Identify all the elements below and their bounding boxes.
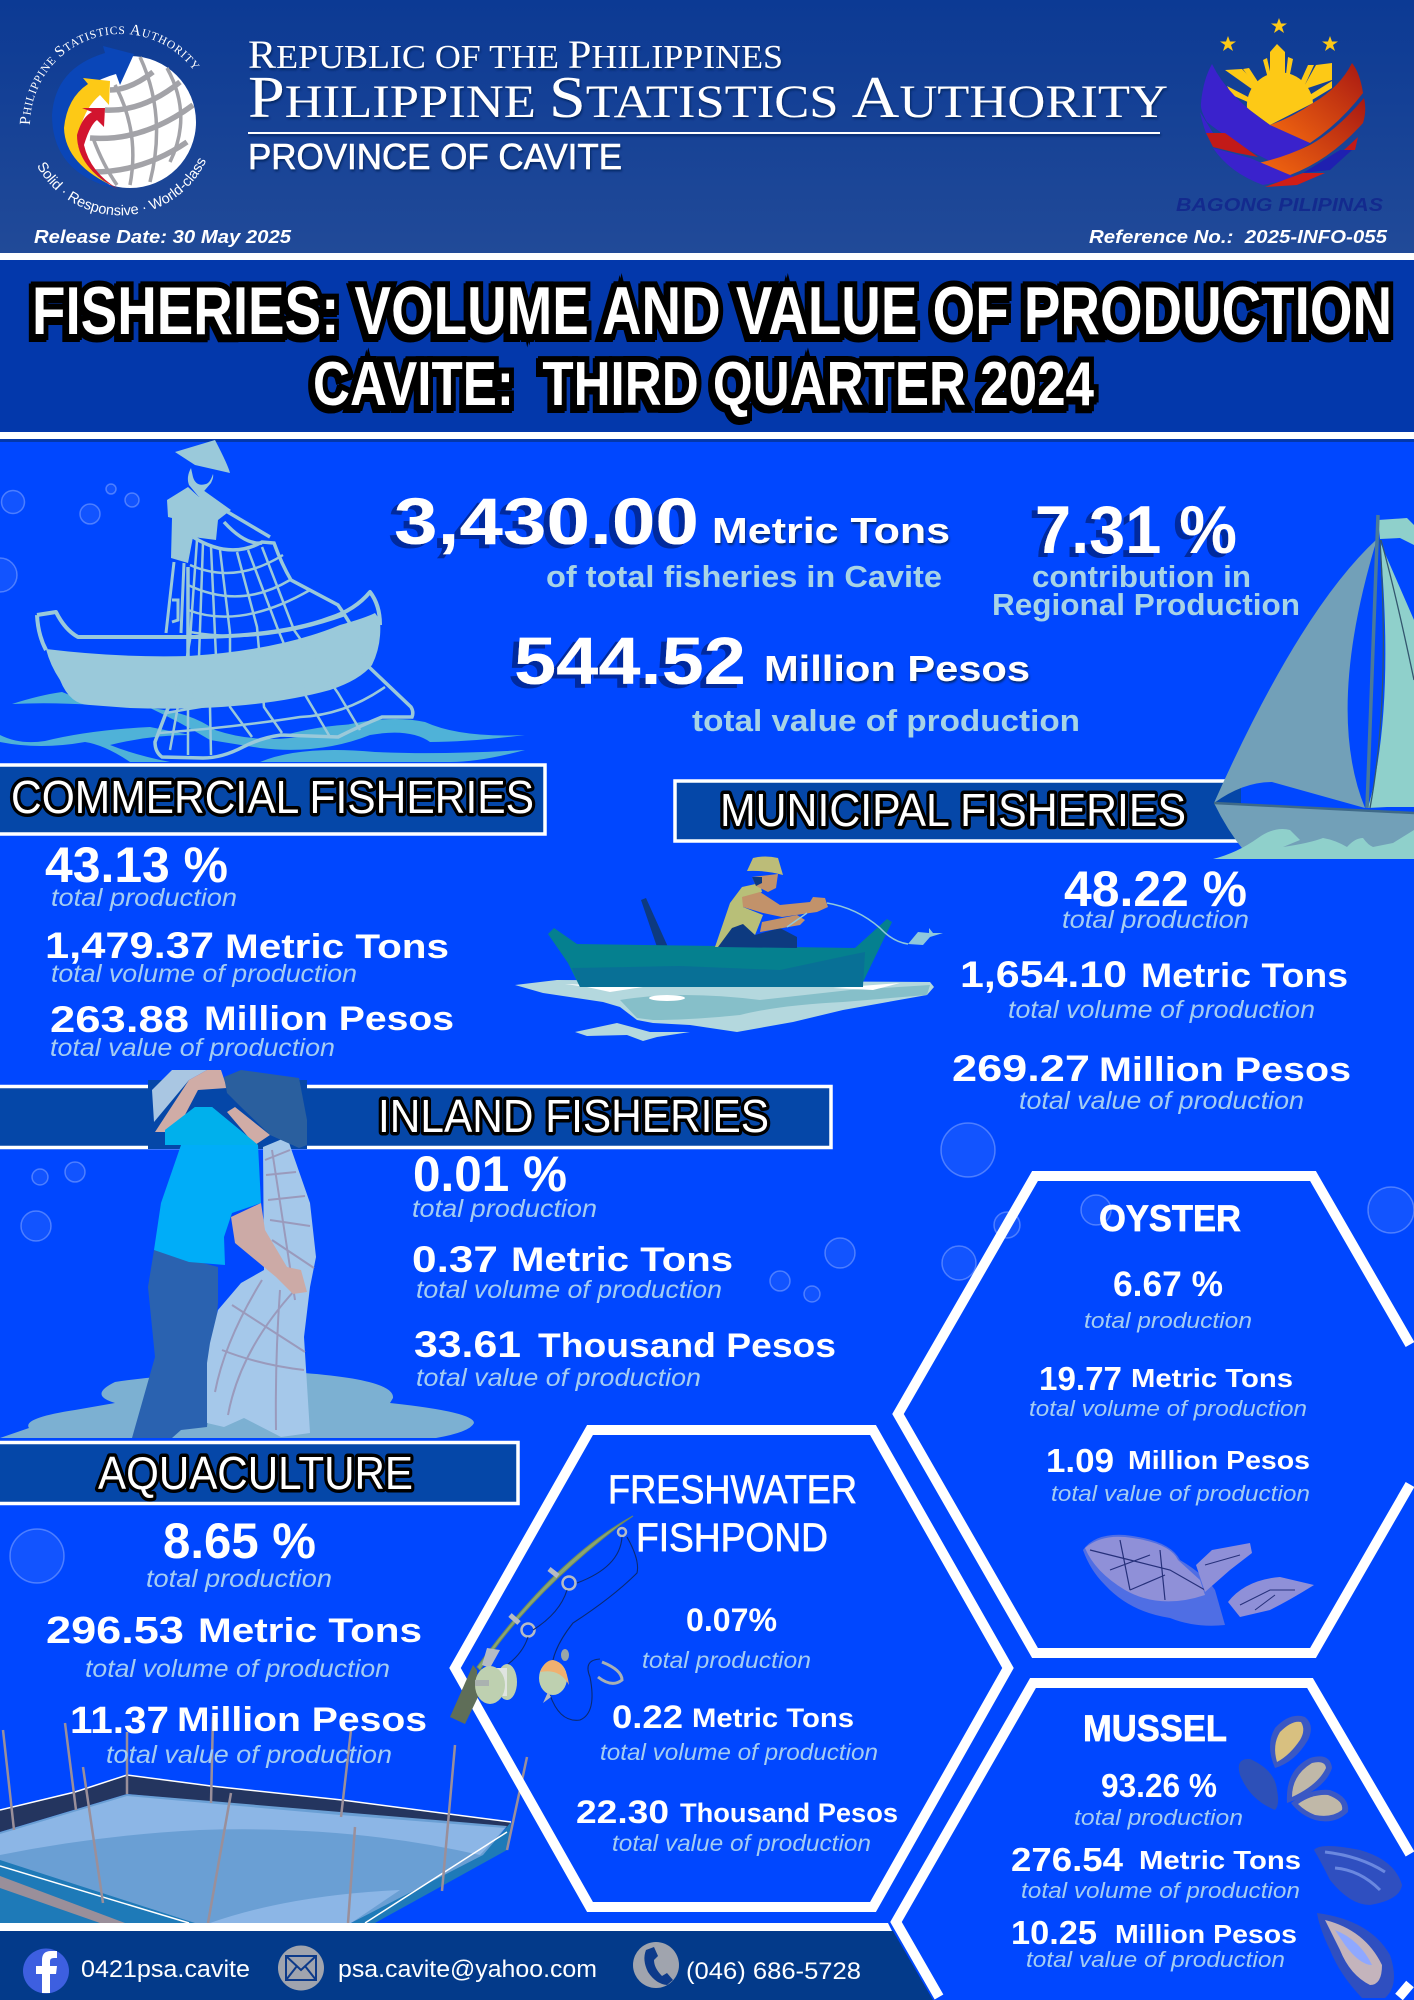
value: total value of production [1026,1947,1285,1972]
phone contact [633,1942,861,1988]
logo: Bagong Pilipinas [1176,18,1384,215]
seal lettering: Solid · Responsive · World-class [38,158,206,216]
volume: total volume of production [416,1276,722,1304]
waves [0,692,525,762]
agency heading [248,32,1168,177]
illustration: mussels [1239,1716,1402,1998]
value [414,1324,836,1392]
share: total production [146,1565,332,1593]
share: total production [412,1195,597,1223]
logo: Philippine Statistics Authority seal [20,24,206,216]
value: total value of production [1019,1087,1304,1115]
total volume: Metric Tons [712,510,950,551]
lower arm [231,1203,307,1294]
phone contact: (046) 686-5728 [686,1958,861,1985]
share: 93.26 % [1101,1767,1217,1804]
facebook contact [23,1948,250,1994]
heading [0,1080,831,1149]
illustration: fishing rod [450,1516,638,1724]
panel: freshwater fishpond hexagon [450,1430,1008,1907]
regional contribution [992,492,1300,622]
title band [0,253,1414,442]
panel: inland fisheries [0,1080,836,1392]
value: total value of production [612,1830,871,1856]
total volume: of total fisheries in Cavite [546,559,942,594]
value: Million Pesos [1099,1051,1351,1089]
value [1011,1914,1297,1972]
subtitle: CAVITE: THIRD QUARTER 2024 [313,350,1094,419]
volume [412,1239,733,1304]
volume: 0.22 [612,1699,683,1735]
heading [608,1468,857,1560]
total value: Million Pesos [764,648,1030,689]
volume: Metric Tons [198,1612,422,1650]
volume: total volume of production [600,1739,878,1765]
volume: 19.77 [1039,1360,1122,1397]
agency heading: REPUBLIC OF THE PHILIPPINES [248,32,783,77]
shirt [154,1107,261,1265]
panel: aquaculture [0,1442,527,1923]
volume: 296.53 [46,1610,184,1652]
share [642,1602,811,1673]
value: 33.61 [414,1324,521,1365]
value: Million Pesos [204,1000,454,1038]
hat [224,1070,307,1148]
value: 269.27 [952,1048,1090,1089]
value: 22.30 [576,1794,669,1830]
panel: commercial fisheries [0,765,545,1062]
email contact: psa.cavite@yahoo.com [338,1956,597,1983]
volume: total volume of production [1029,1396,1307,1421]
regional contribution: contribution in [1032,559,1251,594]
pond illustration [0,1717,527,1923]
fishing line and fish [787,903,908,944]
total value: total value of production [692,703,1080,738]
decorative bubbles [0,484,1414,1583]
value: total value of production [50,1034,335,1062]
share [1074,1767,1243,1830]
header band [0,0,1414,253]
casting net [155,537,413,758]
share: 43.13 % [45,837,228,893]
total value: 544.52 [514,624,746,699]
volume [1029,1360,1307,1421]
illustration: sailboat [1213,515,1414,859]
value: total value of production [416,1364,701,1392]
volume: 1,654.10 [960,954,1127,995]
release date: Release Date: 30 May 2025 [34,226,292,247]
value: 10.25 [1011,1914,1097,1951]
volume: Metric Tons [1139,1845,1301,1875]
value [70,1700,427,1769]
logo: Bagong Pilipinas: BAGONG PILIPINAS [1176,194,1384,215]
email contact [278,1946,597,1990]
heading: MUSSEL [1083,1708,1227,1749]
volume [46,1610,422,1683]
share [1084,1265,1252,1333]
puddle [0,1373,474,1438]
boat hull [46,613,380,709]
heading: AQUACULTURE [98,1447,413,1499]
value: 263.88 [50,999,189,1040]
panel: oyster hexagon [898,1176,1410,1653]
volume [45,925,449,988]
volume: total volume of production [1021,1878,1300,1903]
fisherman [175,440,230,473]
volume: 276.54 [1011,1841,1124,1878]
seal lettering [20,24,206,216]
heading: OYSTER [1099,1198,1241,1239]
volume: total volume of production [51,960,357,988]
raised arm [155,1070,227,1132]
share: total production [51,884,237,912]
share: 48.22 % [1064,861,1247,917]
heading [0,1442,518,1504]
agency heading: PHILIPPINE STATISTICS AUTHORITY [248,64,1168,130]
value [952,1048,1351,1115]
share: total production [1062,906,1249,934]
value: 1.09 [1046,1442,1114,1479]
illustration: fisherman casting net from boat [0,440,525,762]
net [207,1137,316,1437]
value: Thousand Pesos [538,1327,836,1365]
total value [514,624,1080,738]
volume: Metric Tons [225,928,449,966]
total volume [394,484,950,594]
heading: MUNICIPAL FISHERIES [720,784,1186,836]
heading: COMMERCIAL FISHERIES [11,771,534,823]
volume: Metric Tons [511,1241,733,1279]
value: 11.37 [70,1700,169,1742]
value: total value of production [106,1741,392,1769]
share: 8.65 % [163,1513,316,1569]
panel: municipal fisheries [675,781,1351,1115]
oar [641,898,668,947]
value: Thousand Pesos [680,1798,898,1828]
value [50,999,454,1062]
volume: total volume of production [85,1655,390,1683]
volume [960,954,1348,1024]
volume: Metric Tons [1141,957,1348,995]
illustration: fisherman holding net [0,1070,474,1438]
illustration: oysters [1083,1535,1314,1626]
share: 6.67 % [1113,1265,1223,1304]
share: total production [642,1647,811,1673]
value [1046,1442,1310,1506]
agency heading: PROVINCE OF CAVITE [248,136,622,177]
volume: Metric Tons [692,1703,854,1733]
heading: FISHPOND [636,1516,828,1560]
share [146,1513,332,1593]
total volume: 3,430.00 [394,484,699,558]
volume: 1,479.37 [45,925,214,966]
heading: INLAND FISHERIES [378,1090,769,1142]
share: 0.07% [686,1602,777,1638]
value: Million Pesos [177,1701,427,1739]
heading: FRESHWATER [608,1468,857,1512]
key stats [394,484,1300,738]
volume [600,1699,878,1765]
footer contact bar [0,1923,933,2000]
illustration: fisherman in boat [515,856,943,1041]
reference number: Reference No.: 2025-INFO-055 [1089,226,1388,247]
volume: Metric Tons [1131,1363,1293,1393]
regional contribution: Regional Production [992,587,1300,622]
trousers [132,1250,218,1438]
value [576,1794,898,1856]
volume: total volume of production [1008,996,1315,1024]
regional contribution: 7.31 % [1035,492,1237,568]
hull [548,919,892,987]
fisherman [715,883,763,947]
volume: 0.37 [412,1239,498,1280]
seal lettering: PHILIPPINE STATISTICS AUTHORITY [20,24,200,125]
share: total production [1074,1805,1243,1830]
value: Million Pesos [1115,1919,1297,1949]
value: total value of production [1051,1481,1310,1506]
share: total production [1084,1308,1252,1333]
facebook contact: 0421psa.cavite [81,1956,250,1983]
water [515,980,934,1032]
value: Million Pesos [1128,1445,1310,1475]
share: 0.01 % [413,1146,567,1202]
volume [1011,1841,1301,1903]
share [412,1146,597,1223]
panel: mussel hexagon [896,1683,1410,1998]
